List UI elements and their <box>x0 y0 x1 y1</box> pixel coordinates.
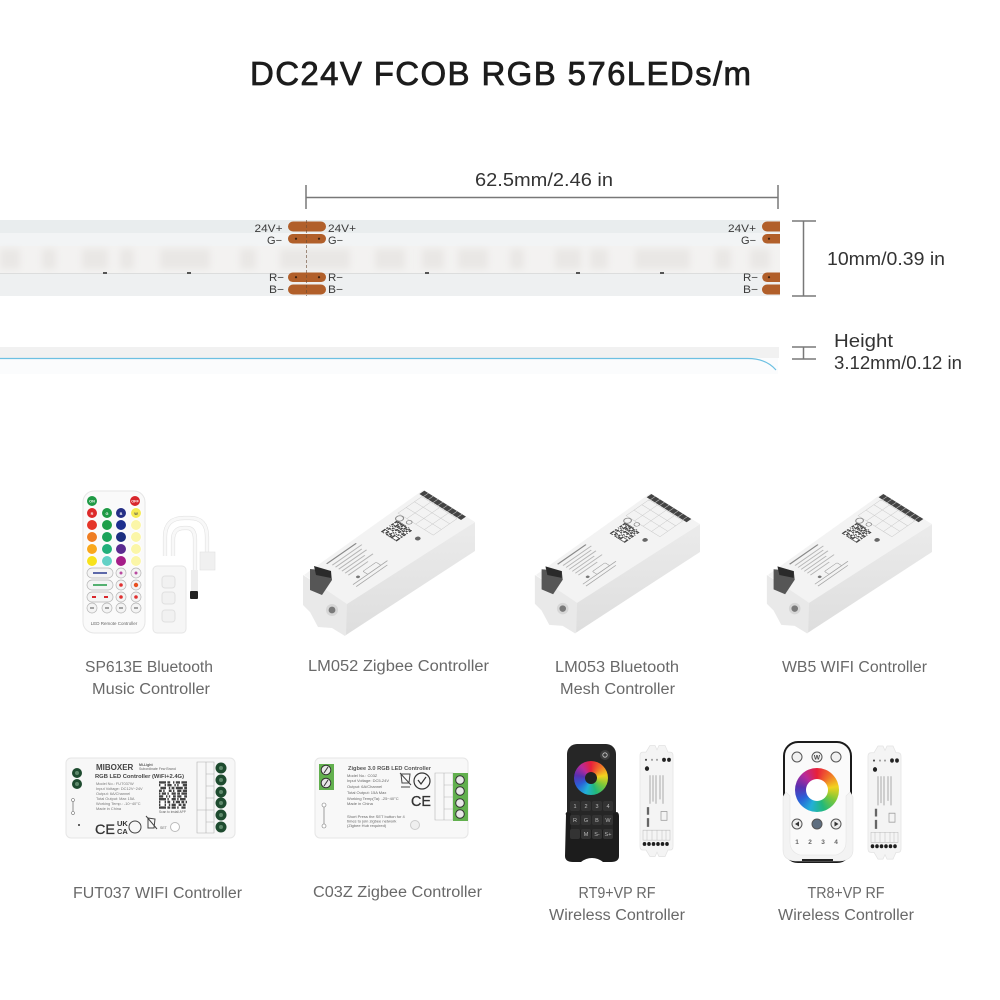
spec lines: times to join zigbee network <box>347 818 396 824</box>
certification marks <box>414 773 430 789</box>
product: FUT037 controller <box>66 758 235 838</box>
spec lines: Working Temp.: -10~40°C <box>96 801 141 806</box>
caption: TR8+VP <box>778 885 914 924</box>
spec lines: Total Output: Max 15A <box>96 796 135 801</box>
solder pads: right end: B− <box>743 284 758 296</box>
certification marks: CE <box>95 821 115 837</box>
remote body <box>784 742 851 862</box>
spec lines <box>96 781 143 811</box>
spec lines: Short Press the SET button for 4 <box>347 814 406 819</box>
remote button letters: OFF <box>131 500 139 504</box>
product: RT9 remote and VP receiver: G <box>584 818 588 824</box>
zone numbers: 2 <box>808 839 812 846</box>
caption: SP613E <box>85 659 213 698</box>
brand and heading: MIBOXER <box>96 763 134 772</box>
caption: RT9+VP: RT9+VP RF <box>578 885 656 902</box>
height dimension: 3.12mm: 3.12mm/0.12 in <box>834 353 962 373</box>
remote button letters: W <box>134 512 138 516</box>
spec lines: Output: 6A/Channel <box>347 784 382 789</box>
product: RT9 remote and VP receiver: W <box>605 818 611 824</box>
width dimension: 10mm: 10mm/0.39 in <box>827 249 945 269</box>
product: RT9 remote and VP receiver: R <box>573 818 577 824</box>
spec lines: Output: 6A/Channel <box>96 791 130 796</box>
caption: C03Z: C03Z Zigbee Controller <box>313 884 482 901</box>
QR code <box>159 781 187 809</box>
width dimension: 10mm <box>792 221 945 296</box>
solder pads: centre cut point: 24V+ <box>328 223 356 235</box>
remote body <box>83 491 145 633</box>
title: DC24V FCOB RGB 576LEDs/m <box>250 55 751 92</box>
caption: FUT037: FUT037 WIFI Controller <box>73 885 242 902</box>
product: RT9 remote and VP receiver: 3 <box>595 804 599 810</box>
caption: LM052: LM052 Zigbee Controller <box>308 658 489 675</box>
power button <box>600 750 610 760</box>
inline controller box <box>153 566 186 633</box>
solder pads: centre cut point: B− <box>328 284 343 296</box>
solder pads: centre cut point: R− <box>328 272 343 284</box>
solder pads: centre cut point: G− <box>267 235 282 247</box>
caption: LM053: Mesh Controller <box>560 681 675 698</box>
caption: SP613E: Music Controller <box>92 681 210 698</box>
remote mode buttons <box>87 568 141 613</box>
heading: Zigbee 3.0 RGB LED Controller <box>348 766 432 772</box>
caption: RT9+VP: Wireless Controller <box>549 907 685 924</box>
zone numbers <box>795 839 838 846</box>
product: TR8 remote and VP receiver <box>783 742 901 862</box>
product: C03Z controller <box>315 758 468 838</box>
product: RT9 remote and VP receiver: M <box>584 832 589 838</box>
product: RT9 remote and VP receiver: S- <box>594 832 600 838</box>
product: RT9 remote and VP receiver <box>565 744 673 862</box>
height dimension: 3.12mm: Height <box>834 331 893 351</box>
length dimension: 62.5mm: 62.5mm/2.46 in <box>475 170 613 190</box>
remote holder <box>783 792 853 861</box>
solder pads: right end: R− <box>743 272 758 284</box>
product: LM053 controller <box>535 493 700 634</box>
product: RT9 remote and VP receiver: S+ <box>605 832 611 838</box>
remote holder <box>565 812 619 862</box>
remote colour buttons <box>87 496 141 566</box>
caption: LM053 <box>555 659 679 698</box>
product: RT9 remote and VP receiver: 4 <box>606 804 610 810</box>
colour wheel <box>795 768 839 812</box>
product: LM052 controller <box>303 490 475 636</box>
solder pads: right end: 24V+ <box>728 223 756 235</box>
left terminals <box>72 768 82 789</box>
product: FUT037 controller: Scan to install APP <box>159 810 186 814</box>
solder pads: centre cut point: B− <box>269 284 284 296</box>
right terminals <box>216 762 226 832</box>
product: FUT037 controller: SET <box>160 826 168 830</box>
remote button letters: ON <box>89 500 95 504</box>
caption: SP613E: SP613E Bluetooth <box>85 659 213 676</box>
product: SP613E remote and inline controller <box>83 491 215 633</box>
remote button letters: G <box>106 512 109 516</box>
product: C03Z controller: CE <box>411 793 431 810</box>
VP receiver <box>868 746 901 859</box>
product: FUT037 controller: UK <box>117 819 128 828</box>
caption: LM053: LM053 Bluetooth <box>555 659 679 676</box>
solder pads: right end: G− <box>741 235 756 247</box>
output table <box>197 762 214 833</box>
solder pads: right end <box>728 222 780 296</box>
caption: WB5: WB5 WIFI Controller <box>782 659 927 676</box>
spec lines <box>347 773 406 828</box>
zone numbers: 1 <box>795 839 799 846</box>
solder pads: centre cut point: 24V+ <box>254 223 282 235</box>
product: FUT037 controller: Mi-Light <box>139 763 153 767</box>
LED strip top view <box>0 220 780 296</box>
spec lines: Model No.: C03Z <box>347 773 378 778</box>
spec lines: Working Temp(Ta): -25~40°C <box>347 796 399 801</box>
spec lines: Input Voltage: DC5-24V <box>347 778 389 783</box>
keypad <box>570 801 613 839</box>
remote body <box>567 744 616 857</box>
colour wheel <box>574 761 608 795</box>
caption: TR8+VP: Wireless Controller <box>778 907 914 924</box>
caption: TR8+VP: TR8+VP RF <box>808 885 884 902</box>
remote button letters <box>89 500 139 516</box>
right terminal block <box>453 773 468 821</box>
spec lines: Model No.: FUT037W <box>96 781 134 786</box>
solder pads: centre cut point <box>254 220 356 296</box>
LED strip side view <box>0 347 779 374</box>
VP receiver <box>640 746 673 857</box>
product: RT9 remote and VP receiver: 1 <box>573 804 577 810</box>
height dimension: 3.12mm <box>792 331 962 373</box>
solder pads: centre cut point: R− <box>269 272 284 284</box>
left terminal block <box>319 764 334 790</box>
top buttons <box>792 752 841 762</box>
solder pads: centre cut point: G− <box>328 235 343 247</box>
zone numbers: 3 <box>821 839 825 846</box>
product: TR8 remote and VP receiver: W <box>814 754 821 762</box>
remote button letters: R <box>91 512 94 516</box>
product: FUT037 controller: RGB LED Controller (WiFi+2.4G) <box>95 774 184 780</box>
product: RT9 remote and VP receiver: 2 <box>584 804 588 810</box>
zone numbers: 4 <box>834 839 838 846</box>
spec lines: Made in China <box>96 806 122 811</box>
product: SP613E remote and inline controller: LED Remote Controller <box>91 621 138 626</box>
output table <box>435 773 453 820</box>
spec lines: Made in China <box>347 801 374 806</box>
length dimension: 62.5mm <box>306 170 778 209</box>
remote button letters: B <box>120 512 123 516</box>
product: RT9 remote and VP receiver: B <box>595 818 599 824</box>
spec lines: Total Output: 15A Max <box>347 790 386 795</box>
product: WB5 controller <box>767 493 932 634</box>
lower buttons <box>792 819 841 829</box>
caption: RT9+VP <box>549 885 685 924</box>
product: FUT037 controller: CA <box>117 827 128 836</box>
USB cables <box>165 518 207 572</box>
product: FUT037 controller: Subordinate Few Brand <box>139 767 176 771</box>
spec lines: (Zigbee Hub required) <box>347 823 387 828</box>
spec lines: Input Voltage: DC12V~24V <box>96 786 143 791</box>
